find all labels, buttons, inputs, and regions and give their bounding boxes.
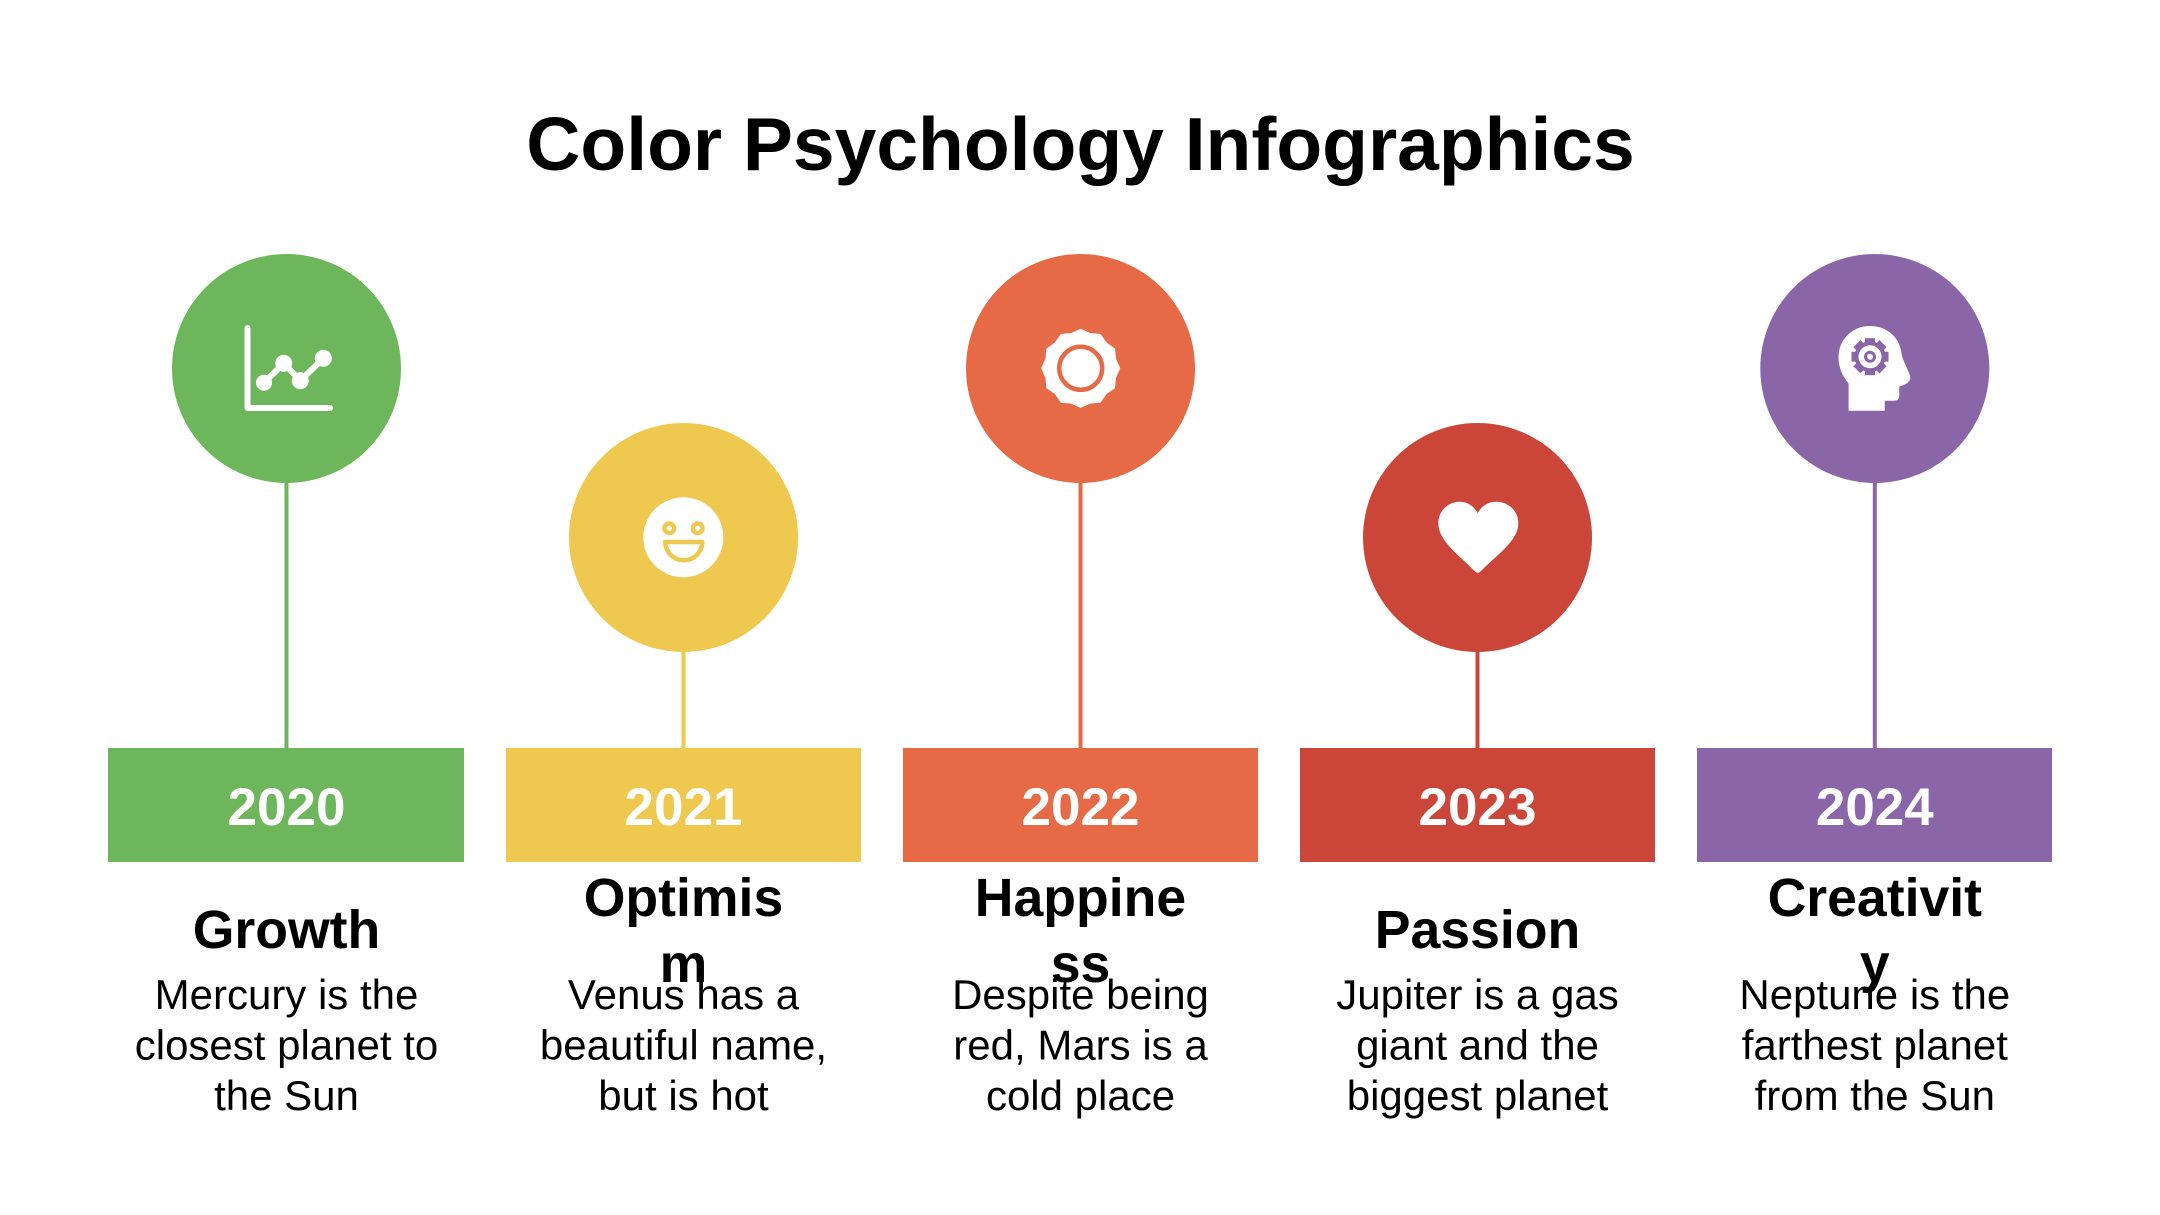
circle: 2024 [1760, 254, 1989, 483]
description: Passion: giant and the [1356, 1022, 1599, 1068]
description: Creativity: from the Sun [1755, 1072, 1995, 1119]
icon: head with gear [1839, 327, 1910, 410]
description: Optimism: Venus has a [568, 971, 800, 1018]
heading: Optimism: m [660, 934, 707, 994]
year label: 2021: 2021 [625, 778, 742, 837]
description: Passion: biggest planet [1347, 1072, 1609, 1119]
description: Happiness: cold place [986, 1072, 1175, 1119]
circle: 2020 [172, 254, 401, 483]
year label: 2023: 2023 [1419, 778, 1536, 837]
description: Happiness: red, Mars is a [953, 1022, 1208, 1068]
year label: 2024: 2024 [1816, 778, 1934, 837]
panel: 2023 passion [1300, 423, 1655, 1119]
description: Growth: closest planet to [135, 1022, 438, 1068]
panel: 2022 happiness [903, 254, 1258, 1119]
panel: 2021 optimism [506, 423, 861, 1119]
circle: 2021 [569, 423, 798, 652]
icon: sun badge [1043, 330, 1119, 406]
heading: Happiness: Happine [975, 868, 1186, 928]
heading: Creativity: y [1860, 934, 1890, 994]
connector line: 2023 [1476, 650, 1480, 750]
year label: 2022: 2022 [1022, 778, 1139, 837]
year bar: 2021 [506, 748, 861, 862]
heading: Creativity: Creativit [1768, 868, 1982, 928]
connector line: 2020 [284, 480, 288, 750]
connector line: 2021 [682, 650, 686, 750]
year label: 2020: 2020 [228, 778, 345, 837]
title: Color Psychology Infographics [526, 102, 1635, 186]
circle: 2023 [1363, 423, 1592, 652]
description: Happiness: Despite being [952, 971, 1209, 1018]
year bar: 2022 [903, 748, 1258, 862]
heading: Growth: Growth [193, 900, 380, 960]
heading: Happiness: ss [1051, 934, 1110, 994]
icon: smiling face [643, 497, 723, 577]
description: Creativity: Neptune is the [1739, 971, 2010, 1018]
description: Growth: Mercury is the [155, 971, 418, 1018]
connector line: 2022 [1078, 480, 1082, 750]
description: Creativity: farthest planet [1742, 1022, 2008, 1068]
icon: heart [1438, 502, 1518, 573]
year bar: 2024 [1697, 748, 2052, 862]
year bar: 2023 [1300, 748, 1655, 862]
year bar: 2020 [108, 748, 464, 862]
description: Passion: Jupiter is a gas [1336, 971, 1619, 1018]
circle: 2022 [966, 254, 1195, 483]
description: Optimism: beautiful name, [540, 1022, 827, 1068]
heading: Optimism: Optimis [584, 868, 783, 928]
connector line: 2024 [1873, 480, 1877, 750]
panel: 2020 growth [108, 254, 464, 1119]
description: Growth: the Sun [214, 1072, 359, 1119]
heading: Passion: Passion [1375, 900, 1580, 960]
icon: line chart [248, 328, 332, 408]
description: Optimism: but is hot [598, 1072, 769, 1119]
panel: 2024 creativity [1697, 254, 2052, 1119]
